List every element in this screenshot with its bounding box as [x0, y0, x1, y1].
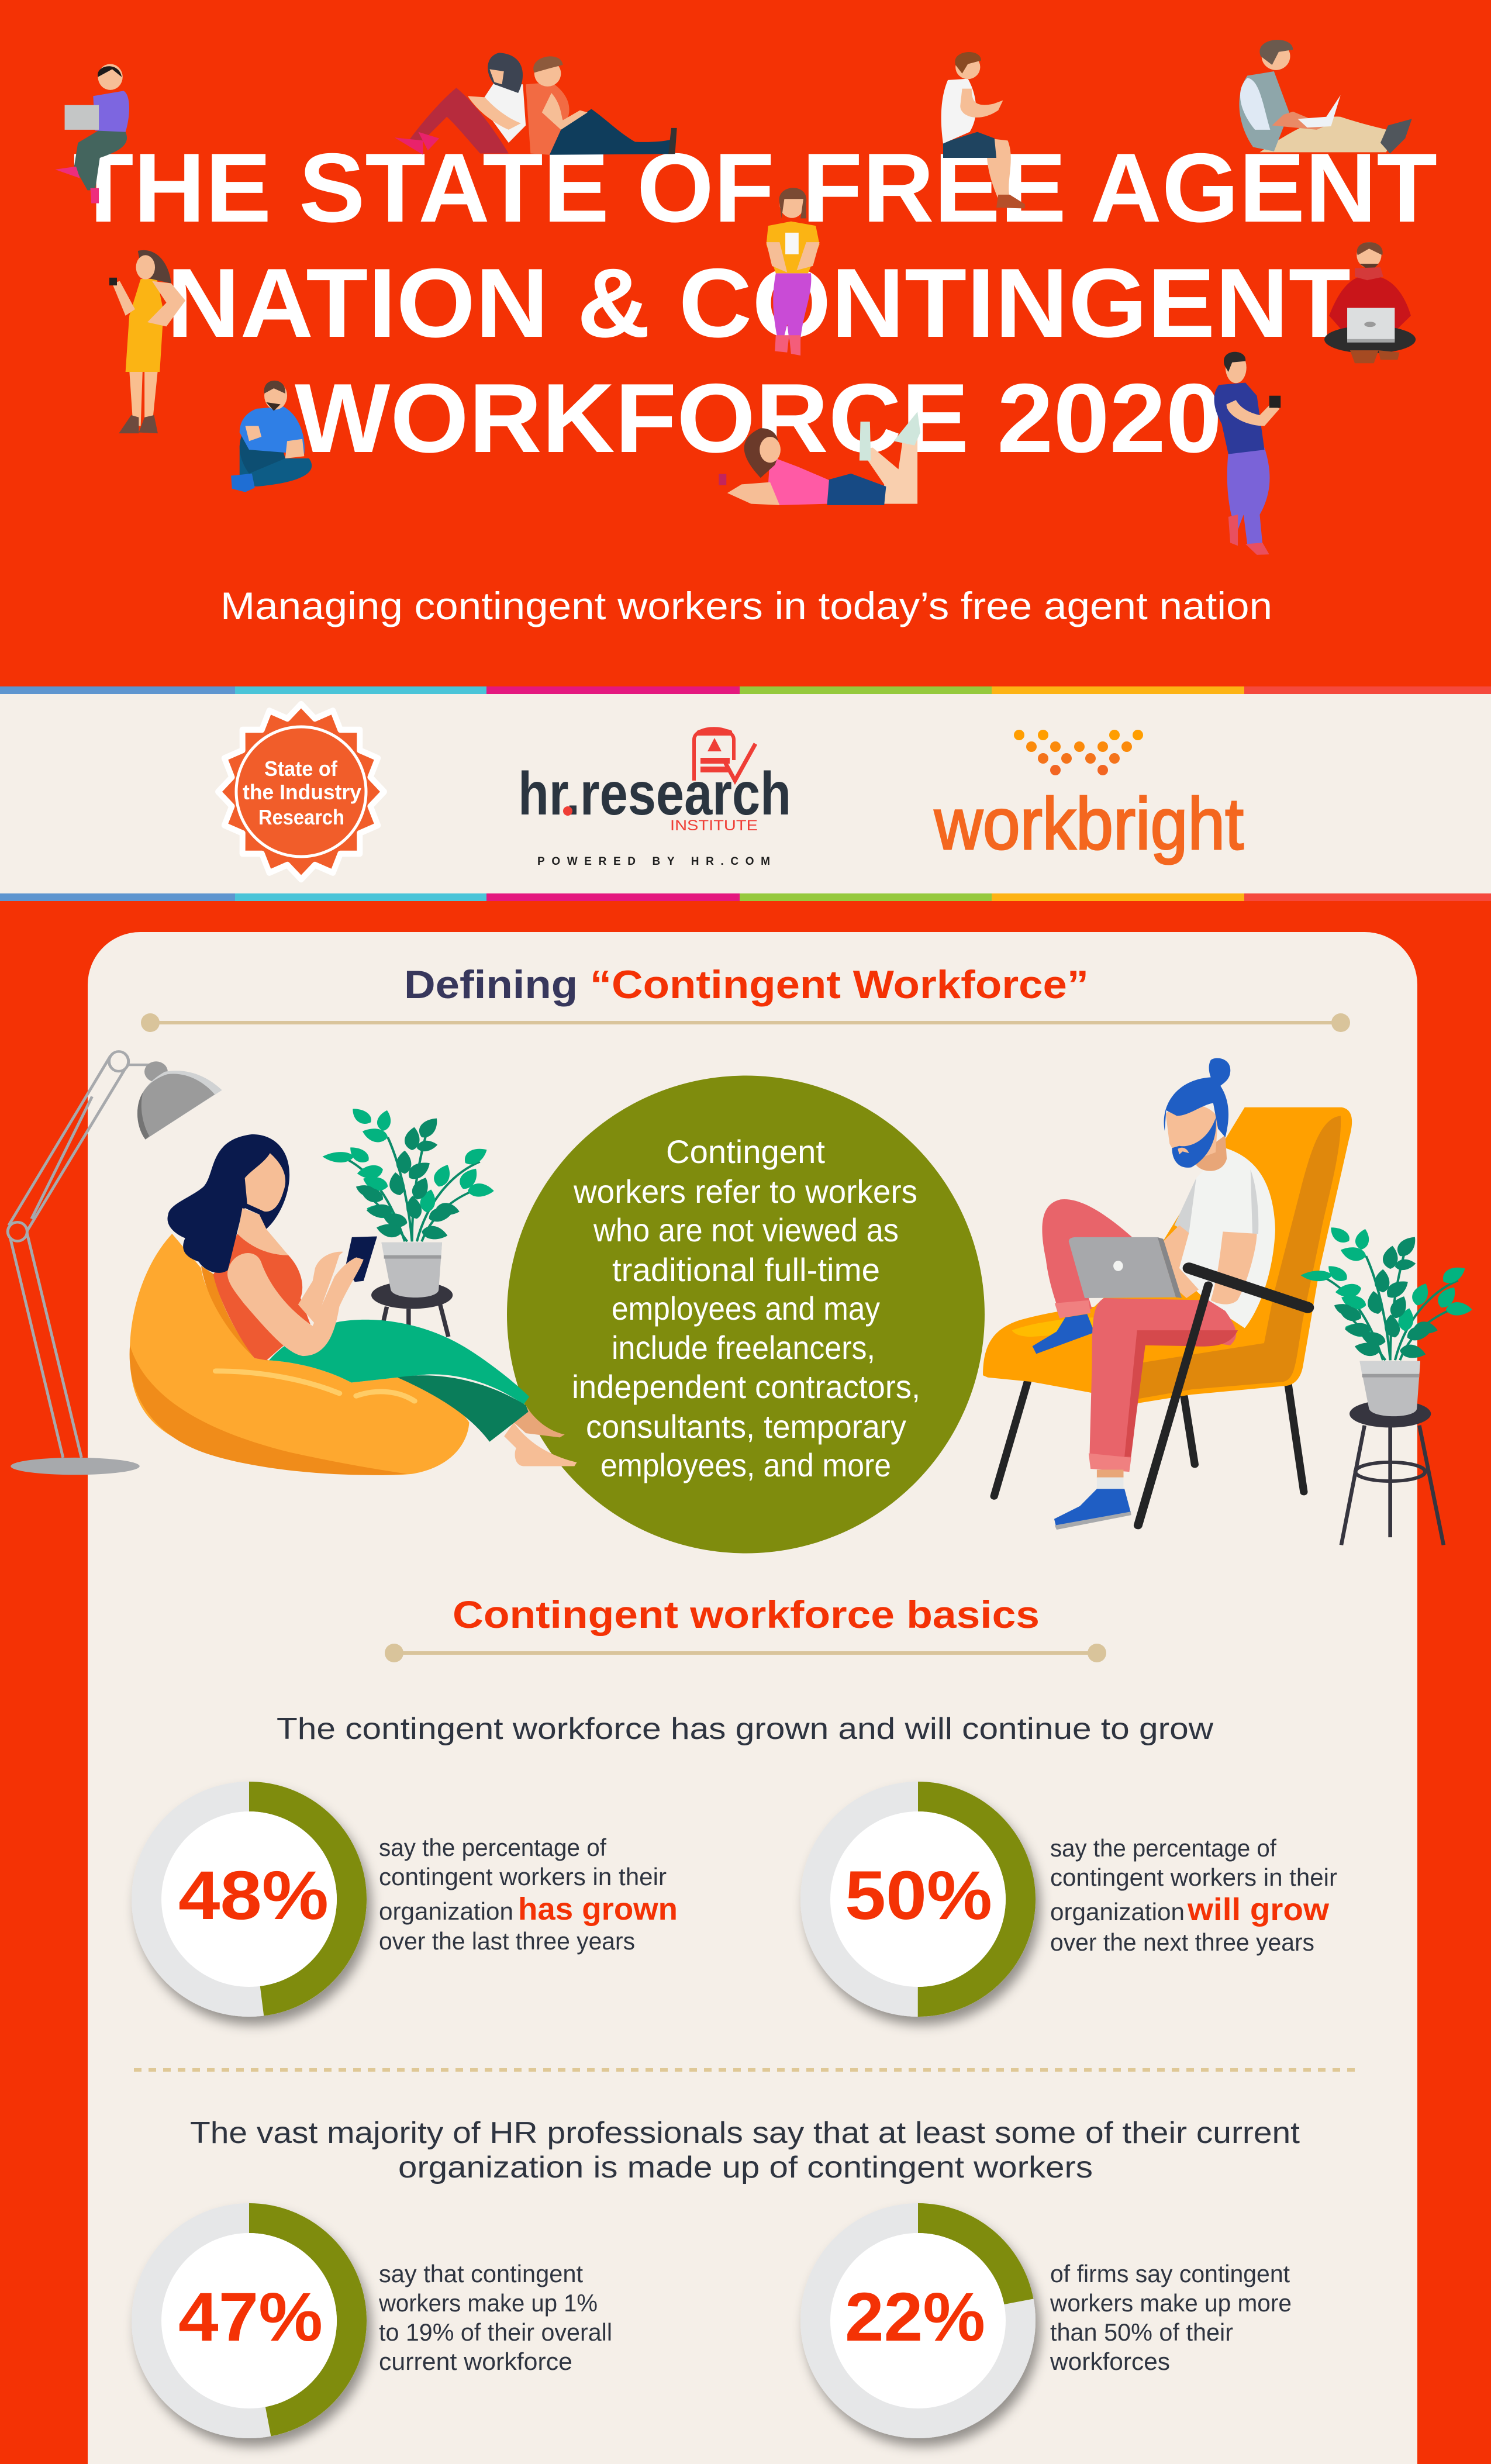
text: 47 percent description: to 19% of their overall: [379, 2318, 612, 2346]
basics divider: [385, 1644, 1106, 1662]
subheading: workforce composition: organization is made up of contingent workers: [398, 2151, 1093, 2185]
definition circle: include freelancers,: [612, 1329, 875, 1366]
subheading: workforce composition: [190, 2116, 1300, 2185]
person: woman lying down: [719, 412, 920, 505]
person: couple sitting back to back: [395, 53, 677, 155]
text: 22 percent description: workforces: [1050, 2348, 1170, 2375]
definition circle: who are not viewed as: [593, 1212, 899, 1248]
panel: defining contingent workforce: [88, 932, 1417, 2464]
subtitle: Managing contingent workers in today’s free agent nation: [220, 584, 1272, 627]
illustration: floor lamp: [8, 1051, 222, 1475]
text: 50 percent description: will grow: [1187, 1892, 1330, 1927]
logo: workbright: workbright: [934, 784, 1244, 865]
definition circle: employees and may: [612, 1290, 880, 1327]
subheading: workforce composition: The vast majority of HR professionals say that at least some of their current: [190, 2116, 1300, 2150]
illustration: man in armchair with laptop: [983, 1058, 1352, 1530]
definition circle: consultants, temporary: [586, 1408, 906, 1445]
text: 47 percent description: current workforce: [379, 2348, 572, 2375]
donut: 22 percent: [800, 2203, 1036, 2438]
text: 22 percent description: of firms say contingent: [1050, 2260, 1290, 2287]
logo band: [0, 686, 1491, 901]
logo: State of the Industry Research badge: State of: [264, 757, 338, 781]
definition circle: independent contractors,: [572, 1368, 920, 1405]
text: 22 percent description: [1050, 2260, 1292, 2375]
text: 48 percent description: over the last three years: [379, 1927, 635, 1955]
logo: State of the Industry Research badge: Research: [258, 805, 344, 829]
text: 48 percent description: has grown: [518, 1892, 678, 1927]
text: 47 percent description: workers make up 1%: [378, 2289, 598, 2317]
subheading: workforce growth: The contingent workforce has grown and will continue to grow: [277, 1712, 1213, 1746]
text: 50 percent description: organization: [1050, 1898, 1185, 1925]
illustration: plant and stool beside woman: [322, 1105, 494, 1337]
dotted divider: [134, 2068, 1359, 2072]
title: THE STATE OF FREE AGENT: [73, 133, 1437, 243]
donut: 47 percent: 47%: [178, 2279, 323, 2356]
definition circle: employees, and more: [600, 1447, 891, 1483]
text: 48 percent description: organization: [379, 1897, 513, 1925]
person: man standing with phone: [1214, 352, 1281, 555]
donut: 50 percent: [800, 1782, 1036, 2017]
logo: hr.research institute: [518, 729, 791, 868]
text: 50 percent description: say the percentage of: [1050, 1834, 1276, 1862]
logo: workbright: [934, 730, 1244, 865]
heading: defining contingent workforce: Defining “Contingent Workforce”: [404, 962, 1089, 1007]
text: 48 percent description: [379, 1834, 678, 1955]
donut: 50 percent: 50%: [845, 1857, 992, 1934]
donut: 48 percent: 48%: [178, 1857, 329, 1934]
definition circle: workers refer to workers: [573, 1173, 917, 1210]
text: 48 percent description: contingent workers in their: [379, 1863, 667, 1890]
definition circle: [507, 1076, 985, 1553]
title: NATION & CONTINGENT: [167, 248, 1351, 358]
heading divider: [141, 1013, 1350, 1032]
illustration: plant on tall stool: [1300, 1224, 1472, 1545]
text: 22 percent description: than 50% of their: [1050, 2318, 1233, 2346]
logo: State of the Industry Research badge: [218, 704, 384, 879]
title: WORKFORCE 2020: [295, 363, 1222, 473]
person: woman with laptop: [55, 64, 129, 203]
title: [73, 133, 1437, 473]
donut: 48 percent: [132, 1782, 367, 2017]
person: man in red sweater with laptop: [1324, 242, 1416, 363]
text: 22 percent description: workers make up more: [1050, 2289, 1292, 2317]
text: 50 percent description: contingent workers in their: [1050, 1863, 1337, 1891]
logo: hr.research institute: hr.research: [518, 760, 791, 828]
definition circle: traditional full-time: [612, 1251, 880, 1288]
person: man in blue shirt: [231, 381, 312, 492]
logo: State of the Industry Research badge: the Industry: [243, 780, 361, 804]
logo: hr.research institute: INSTITUTE: [670, 817, 758, 834]
person: man with laptop: [1239, 40, 1412, 154]
donut: 22 percent: 22%: [845, 2279, 985, 2356]
logo: hr.research institute: POWERED BY HR.COM: [537, 855, 770, 868]
text: 47 percent description: [378, 2260, 612, 2375]
definition circle: Contingent: [666, 1133, 825, 1170]
donut: 47 percent: [132, 2203, 367, 2438]
text: 47 percent description: say that contingent: [379, 2260, 583, 2287]
person: woman in yellow top with phone: [767, 188, 820, 356]
person: man in white shirt: [941, 52, 1025, 208]
text: 50 percent description: [1050, 1834, 1337, 1956]
heading: contingent workforce basics: Contingent workforce basics: [453, 1593, 1040, 1636]
text: 50 percent description: over the next three years: [1050, 1928, 1314, 1956]
text: 48 percent description: say the percentage of: [379, 1834, 606, 1861]
person: woman in yellow dress: [109, 250, 185, 433]
illustration: woman on beanbag: [130, 1134, 577, 1475]
